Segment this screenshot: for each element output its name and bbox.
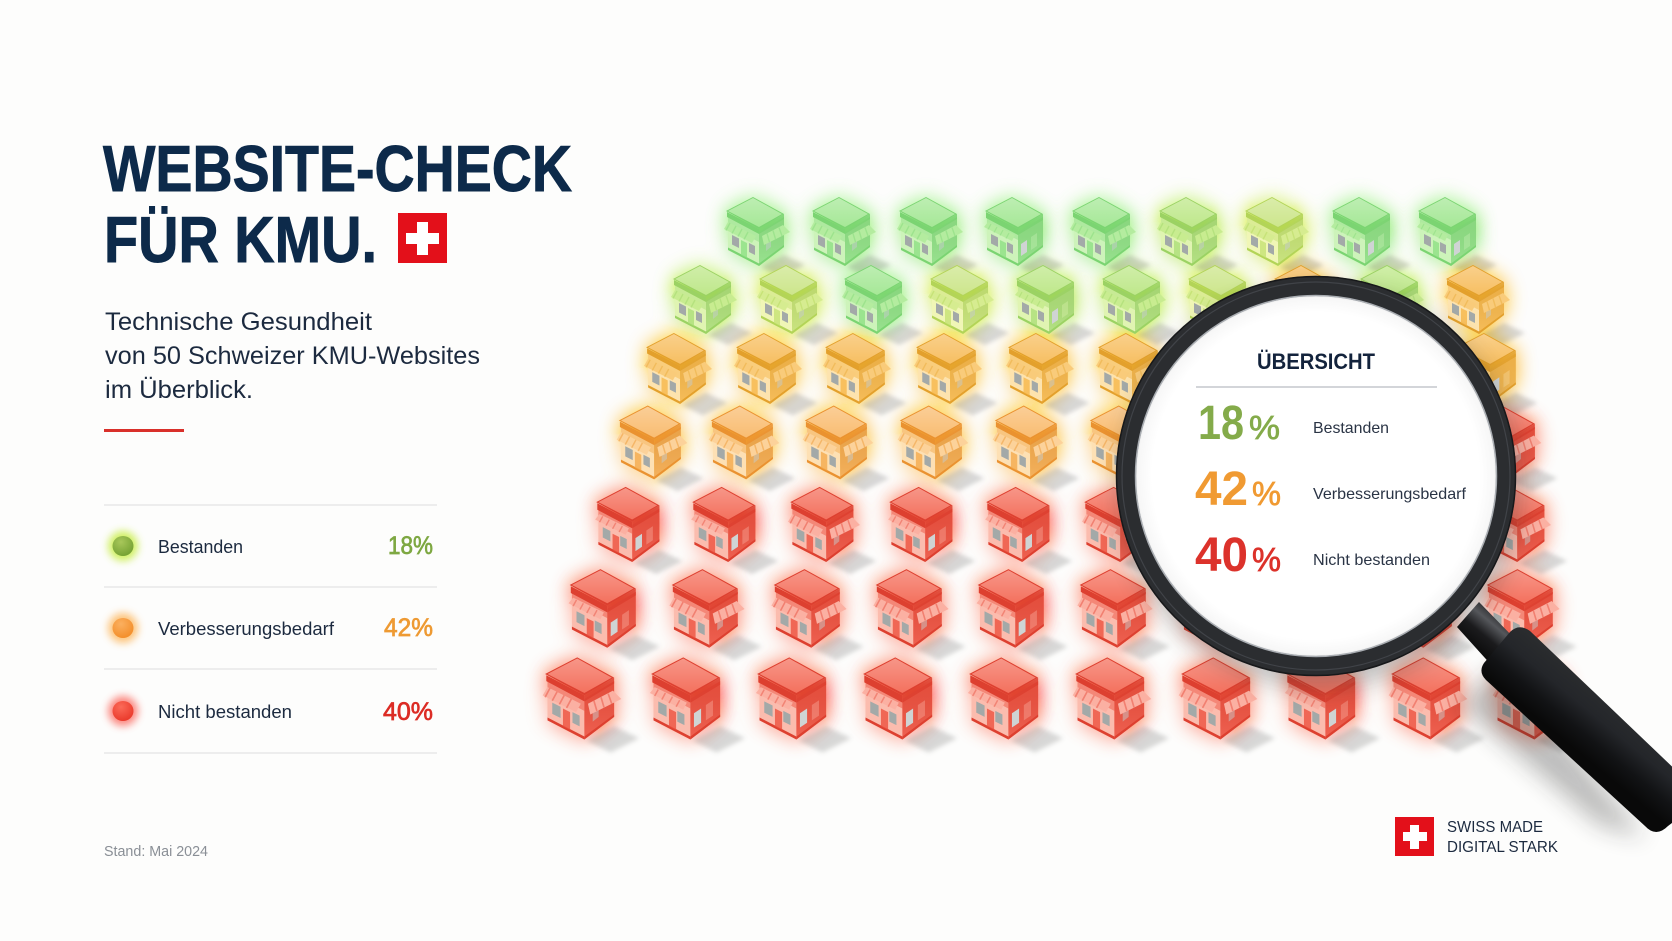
handle neck	[1457, 602, 1517, 668]
title: FÜR KMU.	[104, 203, 377, 276]
row 3: amber shops	[644, 333, 1537, 415]
legend row: Bestanden	[108, 531, 433, 561]
colored glow behind shops	[543, 197, 1571, 739]
subtitle: im Überblick.	[105, 376, 253, 404]
red accent line	[104, 429, 184, 432]
stat: 42% Verbesserungsbedarf: Verbesserungsbedarf	[1313, 486, 1467, 503]
title: WEBSITE-CHECK	[103, 132, 572, 205]
legend row: Nicht bestanden	[108, 696, 433, 726]
row 2: light green shops	[671, 265, 1525, 345]
badge: swiss made: SWISS MADE	[1447, 819, 1543, 836]
stat: 40% Nicht bestanden	[1195, 529, 1430, 582]
row 5: red shops	[595, 487, 1567, 574]
overview heading: ÜBERSICHT	[1257, 349, 1376, 374]
stat: 42% Verbesserungsbedarf: 42	[1195, 463, 1248, 516]
magnifier shadow	[1120, 288, 1645, 838]
row 6: red shops	[569, 569, 1577, 660]
subtitle: Technische Gesundheit	[105, 308, 372, 336]
stat: 42% Verbesserungsbedarf	[1195, 463, 1467, 516]
magnifying glass	[1116, 276, 1672, 838]
date note: Stand: Mai 2024	[104, 844, 208, 860]
row 4: orange shops	[617, 406, 1557, 491]
legend row: Bestanden: Bestanden	[158, 536, 243, 557]
badge: swiss made: DIGITAL STARK	[1447, 839, 1559, 856]
title	[103, 132, 572, 276]
legend row: Verbesserungsbedarf: 42%	[384, 614, 433, 642]
stat: 18% Bestanden: %	[1249, 409, 1280, 446]
legend row: Nicht bestanden: Nicht bestanden	[158, 701, 292, 722]
row 1: green shops	[724, 197, 1497, 277]
subtitle	[105, 308, 480, 404]
legend row: Bestanden: 18%	[388, 532, 433, 560]
stat: 40% Nicht bestanden: 40	[1195, 529, 1248, 582]
stat: 18% Bestanden: 18	[1198, 397, 1244, 450]
stat: 18% Bestanden: Bestanden	[1313, 420, 1389, 437]
subtitle: von 50 Schweizer KMU-Websites	[105, 342, 480, 370]
legend row: Verbesserungsbedarf	[108, 613, 433, 643]
stat: 40% Nicht bestanden: Nicht bestanden	[1313, 552, 1430, 569]
lens ring	[1116, 276, 1516, 676]
legend row: Verbesserungsbedarf: Verbesserungsbedarf	[158, 618, 335, 639]
legend row: Nicht bestanden: 40%	[383, 698, 433, 726]
lens	[1134, 294, 1498, 658]
badge: swiss made	[1395, 817, 1559, 856]
stat: 42% Verbesserungsbedarf: %	[1252, 475, 1281, 512]
icon: swiss flag in title	[398, 213, 447, 263]
legend	[104, 505, 437, 753]
row 7: red shops	[543, 657, 1589, 753]
shop field: 70 isometric shops	[543, 197, 1589, 753]
stat: 40% Nicht bestanden: %	[1252, 541, 1281, 578]
stat: 18% Bestanden	[1198, 397, 1389, 450]
handle grip	[1481, 627, 1672, 832]
lens content: overview	[1195, 349, 1467, 582]
